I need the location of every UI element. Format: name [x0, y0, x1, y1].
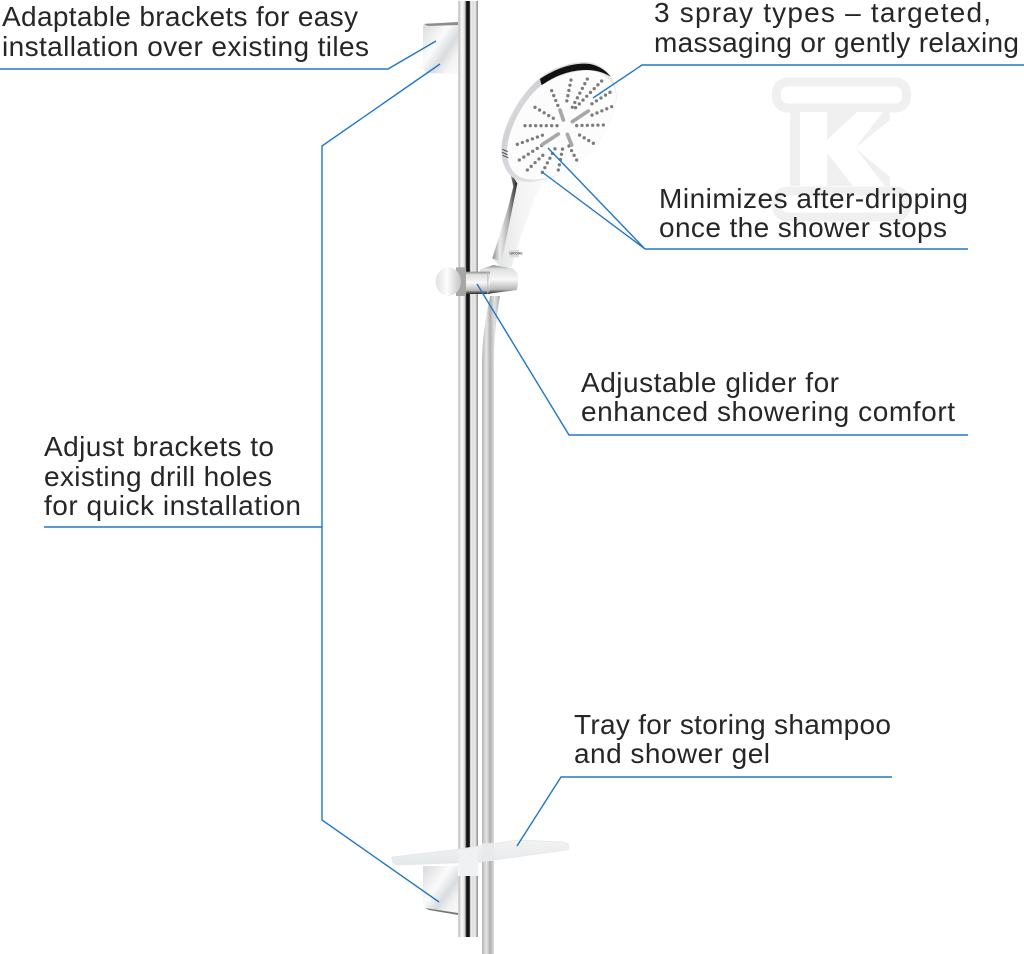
text: glider: Adjustable glider for: [581, 367, 839, 398]
text: adaptable brackets: installation over existing tiles: [2, 31, 369, 62]
text: glider: enhanced showering comfort: [581, 396, 955, 427]
text: spray types: massaging or gently relaxing: [654, 27, 1019, 58]
text: adjust brackets: existing drill holes: [44, 461, 272, 492]
text: after-dripping: [659, 183, 968, 243]
shower head: [501, 62, 617, 182]
hose: [482, 296, 500, 954]
text: after-dripping: Minimizes after-dripping: [659, 183, 968, 214]
handle: [492, 170, 550, 268]
text: adaptable brackets: [2, 1, 369, 62]
text: adaptable brackets: Adaptable brackets for easy: [2, 1, 358, 32]
line: adaptable brackets: [0, 41, 436, 69]
upper wall bracket: [423, 22, 458, 74]
lower wall bracket: [423, 866, 458, 915]
text: adjust brackets: Adjust brackets to: [44, 431, 274, 462]
handle: GROHE: [509, 252, 523, 256]
text: adjust brackets: for quick installation: [44, 490, 301, 521]
text: tray: [574, 709, 891, 769]
text: tray: and shower gel: [574, 738, 770, 769]
text: adjust brackets: [44, 431, 301, 521]
face: [507, 71, 616, 180]
text: after-dripping: once the shower stops: [659, 212, 947, 243]
shell: [501, 62, 617, 182]
line: after-dripping: [542, 148, 968, 249]
line: glider: [477, 284, 968, 435]
hand shower: [436, 62, 617, 296]
text: tray: Tray for storing shampoo: [574, 709, 891, 740]
text: glider: [581, 367, 955, 427]
sliding rail: [458, 1, 478, 937]
soap tray: [392, 840, 569, 876]
spray slots: [543, 110, 588, 145]
line: tray: [517, 777, 892, 846]
text: spray types: [654, 0, 1019, 58]
spray nozzles: [517, 79, 612, 172]
glider: [436, 265, 518, 296]
chrome rim: [540, 64, 611, 86]
watermark logo: [776, 82, 906, 217]
line: adjust brackets: [44, 64, 440, 902]
line: spray types: [593, 65, 1024, 98]
vents: [502, 149, 508, 158]
